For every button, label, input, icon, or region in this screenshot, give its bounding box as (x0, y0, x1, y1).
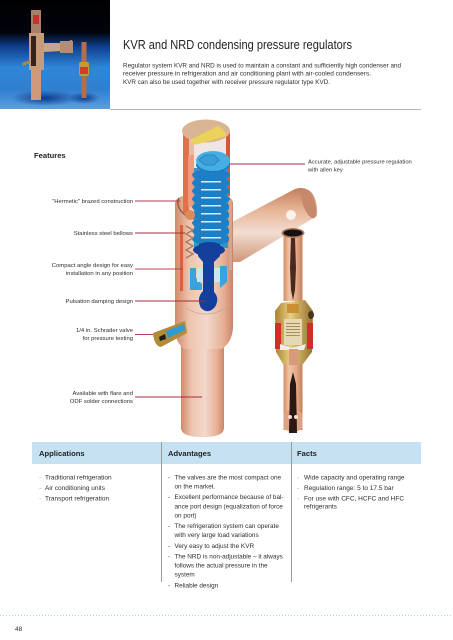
callout: stainless steel bellows (74, 231, 185, 237)
callout: hermetic brazed construction: "Hermetic" brazed construction (52, 199, 133, 205)
list: facts (297, 474, 405, 510)
cap (182, 120, 230, 142)
list: advantages: on port) (174, 512, 197, 520)
callout: adjustable pressure regulation (230, 160, 412, 174)
heading: facts: Facts (297, 449, 317, 458)
dark blue piston (193, 244, 225, 256)
callout: compact angle design: installation in any position (66, 271, 133, 277)
list: advantages: ance port design (equalization of force (174, 504, 283, 510)
list: advantages: - (168, 554, 170, 560)
intro text: KVR can also be used together with receiver pressure regulator type KVD. (123, 79, 330, 86)
intro text (123, 62, 401, 86)
side arm (232, 188, 317, 262)
feature callouts (52, 199, 205, 405)
callout: Schrader valve (76, 328, 153, 342)
list: advantages: The refrigeration system can operate (174, 523, 279, 530)
callout: adjustable pressure regulation: Accurate, adjustable pressure regulation (308, 160, 412, 166)
heading: advantages: Advantages (168, 449, 211, 458)
heading: applications: Applications (39, 449, 85, 458)
panel: facts (297, 449, 405, 510)
heading: features: Features (34, 151, 66, 160)
list: advantages: Excellent performance because of bal- (174, 494, 284, 501)
list: applications: · (39, 496, 41, 502)
list: facts: refrigerants (304, 504, 338, 510)
callout: flare and ODF connections: Available with flare and (73, 391, 133, 397)
callout: hermetic brazed construction (52, 199, 180, 205)
list: applications: Air conditioning units (45, 485, 106, 492)
list: applications (39, 474, 112, 502)
page number: 48 (15, 626, 23, 633)
list: advantages: Reliable design (174, 582, 219, 590)
list: advantages: - (168, 523, 170, 530)
list: applications: · (39, 474, 41, 482)
list: advantages: - (168, 474, 170, 482)
list: advantages: follows the actual pressure in the (174, 562, 268, 570)
list: advantages: The NRD is non-adjustable – it always (174, 554, 283, 560)
intro text: receiver pressure in refrigeration and air conditioning plant with air-cooled condensers. (123, 70, 371, 78)
list: advantages: - (168, 543, 170, 550)
brazed ring (178, 198, 194, 219)
main body (175, 196, 233, 349)
callout: flare and ODF connections (70, 391, 202, 405)
inner valve blue parts (190, 266, 227, 290)
callout: pulsation damping design: Pulsation damping design (66, 299, 133, 305)
callout: stainless steel bellows: Stainless steel bellows (74, 231, 133, 237)
column dividers (161, 442, 292, 582)
list: advantages: - (168, 494, 170, 501)
table header band (32, 442, 421, 464)
callout: Schrader valve: 1/4 in. Schrader valve (76, 328, 134, 334)
callout: adjustable pressure regulation: with allen key (307, 168, 343, 174)
list: facts: Wide capacity and operating range (304, 474, 405, 482)
upper cylinder (183, 131, 230, 201)
photo: valves on blue background (0, 0, 110, 109)
list: advantages: Very easy to adjust the KVR (174, 543, 254, 550)
list: facts: · (297, 485, 299, 492)
callout: Schrader valve: for pressure testing (83, 336, 133, 342)
list: applications: Traditional refrigeration (45, 474, 112, 482)
intro text: Regulator system KVR and NRD is used to maintain a constant and sufficiently high condenser and (123, 62, 401, 70)
list: facts: · (297, 474, 299, 482)
list: advantages: system (174, 572, 195, 578)
callout: pulsation damping design (66, 299, 205, 305)
list: facts: For use with CFC, HCFC and HFC (304, 496, 404, 502)
callout: compact angle design: Compact angle design for easy (52, 263, 133, 269)
list: advantages: The valves are the most compact one (174, 474, 282, 482)
callout: compact angle design (52, 263, 183, 277)
illustration: KVR valve cutaway (153, 120, 320, 437)
lower tube (181, 340, 224, 437)
list: advantages: with very large load variations (174, 532, 259, 539)
illustration: NRD valve cutaway (275, 228, 314, 433)
list: advantages: on the market. (174, 484, 216, 490)
list: advantages: - (168, 582, 170, 590)
list: advantages (168, 474, 284, 590)
title: KVR and NRD condensing pressure regulators (123, 37, 352, 52)
Schrader valve (153, 321, 187, 347)
adjusting screw head (196, 158, 230, 172)
rule under header (110, 109, 421, 110)
callout: flare and ODF connections: ODF solder connections (70, 399, 133, 405)
compact wall and spring (180, 225, 183, 291)
panel: advantages (168, 449, 284, 590)
list: applications: · (39, 485, 41, 492)
panel: applications (39, 449, 112, 502)
blue bellows (194, 168, 228, 248)
list: facts: · (297, 496, 299, 502)
list: facts: Regulation range: 5 to 17.5 bar (304, 485, 394, 492)
list: applications: Transport refrigeration (45, 496, 109, 502)
